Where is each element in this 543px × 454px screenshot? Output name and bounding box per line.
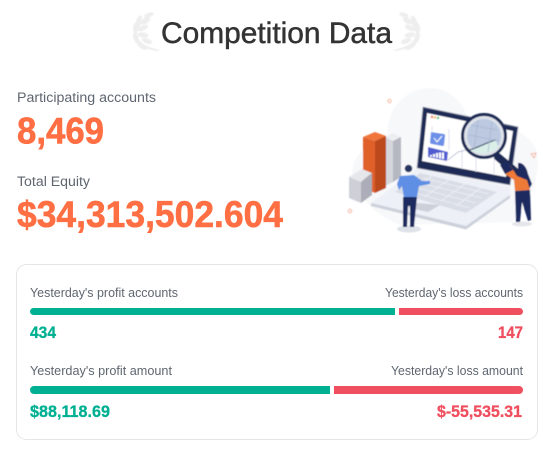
person: man <box>397 165 430 232</box>
background blob <box>353 88 538 225</box>
value: loss accounts: 147 <box>498 324 523 342</box>
magnifier <box>498 157 517 173</box>
touchpad <box>405 203 440 212</box>
value: participating accounts: 8,469 <box>17 110 104 152</box>
screen dots <box>431 116 433 118</box>
label: participating accounts: Participating accounts <box>17 90 156 105</box>
check card <box>430 132 445 146</box>
laptop screen <box>417 107 518 185</box>
label: profit amount: Yesterday's profit amount <box>30 364 173 378</box>
value: loss amount: $-55,535.31 <box>437 403 522 421</box>
value: profit amount: $88,118.69 <box>30 403 110 421</box>
gray tall block <box>385 133 401 186</box>
value: profit accounts: 434 <box>30 324 57 342</box>
bar: accounts loss <box>399 308 523 315</box>
title: Competition Data <box>161 17 392 50</box>
icon: small decorations <box>348 99 536 213</box>
bar: accounts profit <box>30 308 395 315</box>
label: profit accounts: Yesterday's profit accounts <box>30 286 178 300</box>
chart lines <box>432 126 494 175</box>
orange block <box>363 132 386 193</box>
bar: amount loss <box>334 386 523 394</box>
person: woman <box>500 162 532 226</box>
small gray block <box>349 169 372 203</box>
mini bars card <box>428 147 448 161</box>
icon: right laurel <box>393 11 421 51</box>
bar: amount profit <box>30 386 330 394</box>
keyboard <box>395 173 497 213</box>
label: total equity: Total Equity <box>17 174 90 189</box>
illustration: laptop analysis <box>348 88 538 232</box>
label: loss amount: Yesterday's loss amount <box>391 364 524 378</box>
value: total equity: $34,313,502.604 <box>17 194 283 235</box>
label: loss accounts: Yesterday's loss accounts <box>385 286 523 300</box>
icon: left laurel <box>132 11 160 51</box>
laptop base <box>371 169 510 227</box>
panel: yesterday stats <box>16 264 538 440</box>
